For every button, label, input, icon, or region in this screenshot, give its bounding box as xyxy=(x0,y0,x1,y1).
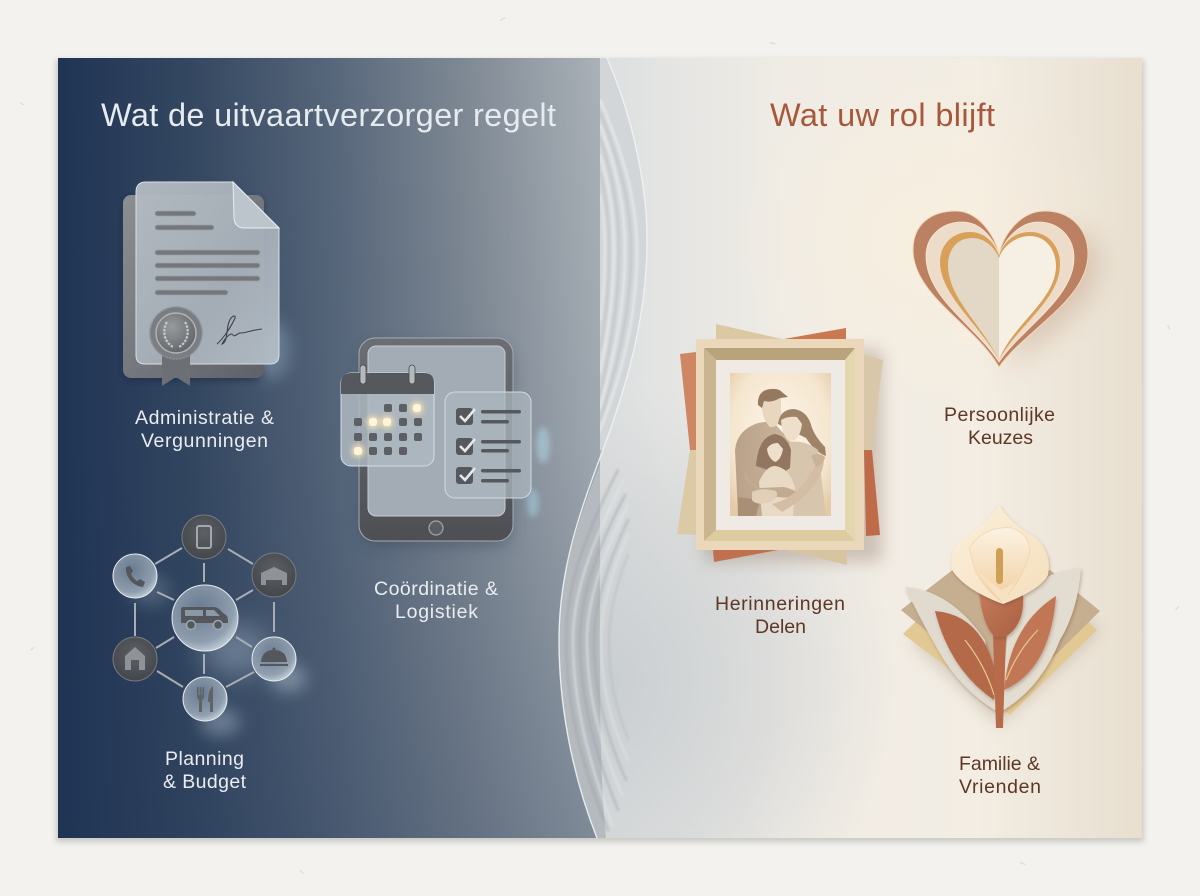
label: Coordinatie en Logistiek: Logistiek xyxy=(395,601,478,623)
checklist xyxy=(445,392,531,498)
icon: tablet with calendar and checklist xyxy=(341,338,539,546)
label: Planning en Budget: Planning xyxy=(165,748,244,770)
label: Familie en Vrienden: Familie & xyxy=(959,753,1040,775)
node: van xyxy=(172,585,238,651)
calendar xyxy=(341,365,434,466)
panel: right background xyxy=(590,58,1142,838)
label: Persoonlijke Keuzes: Keuzes xyxy=(968,427,1033,449)
label: Herinneringen Delen xyxy=(715,593,845,638)
icon: paper heart xyxy=(913,211,1098,368)
label: Coordinatie en Logistiek: Coördinatie & xyxy=(374,578,498,600)
node: telephone xyxy=(113,554,157,598)
label: Coordinatie en Logistiek xyxy=(374,578,498,623)
label: Administratie en Vergunningen xyxy=(135,407,274,452)
node: cutlery xyxy=(183,677,227,721)
node: house xyxy=(113,637,157,681)
label: Administratie en Vergunningen: Administratie & xyxy=(135,407,274,429)
wave edge line xyxy=(559,58,647,838)
label: Persoonlijke Keuzes: Persoonlijke xyxy=(944,404,1055,426)
heading: left: Wat de uitvaartverzorger regelt xyxy=(101,97,556,133)
label: Herinneringen Delen: Delen xyxy=(755,616,806,638)
heading: right: Wat uw rol blijft xyxy=(770,97,995,133)
label: Familie en Vrienden: Vrienden xyxy=(959,776,1041,798)
node: phone xyxy=(182,515,226,559)
label: Persoonlijke Keuzes xyxy=(944,404,1055,449)
label: Familie en Vrienden xyxy=(959,753,1041,798)
label: Planning en Budget xyxy=(163,748,247,793)
label: Herinneringen Delen: Herinneringen xyxy=(715,593,845,615)
icon: document with seal xyxy=(123,182,290,386)
label: Planning en Budget: & Budget xyxy=(163,771,247,793)
panel: left background xyxy=(58,58,600,838)
node: cloche xyxy=(252,637,296,681)
node: garage xyxy=(252,553,296,597)
icon: planning network xyxy=(113,515,306,736)
family figures xyxy=(735,389,826,516)
icon: paper calla lily xyxy=(901,505,1100,728)
paper layers xyxy=(677,324,883,565)
label: Administratie en Vergunningen: Vergunningen xyxy=(141,430,268,452)
divider: ripple wave xyxy=(559,58,647,838)
panel shadow xyxy=(56,60,1144,842)
icon: family photo frame xyxy=(677,324,883,565)
